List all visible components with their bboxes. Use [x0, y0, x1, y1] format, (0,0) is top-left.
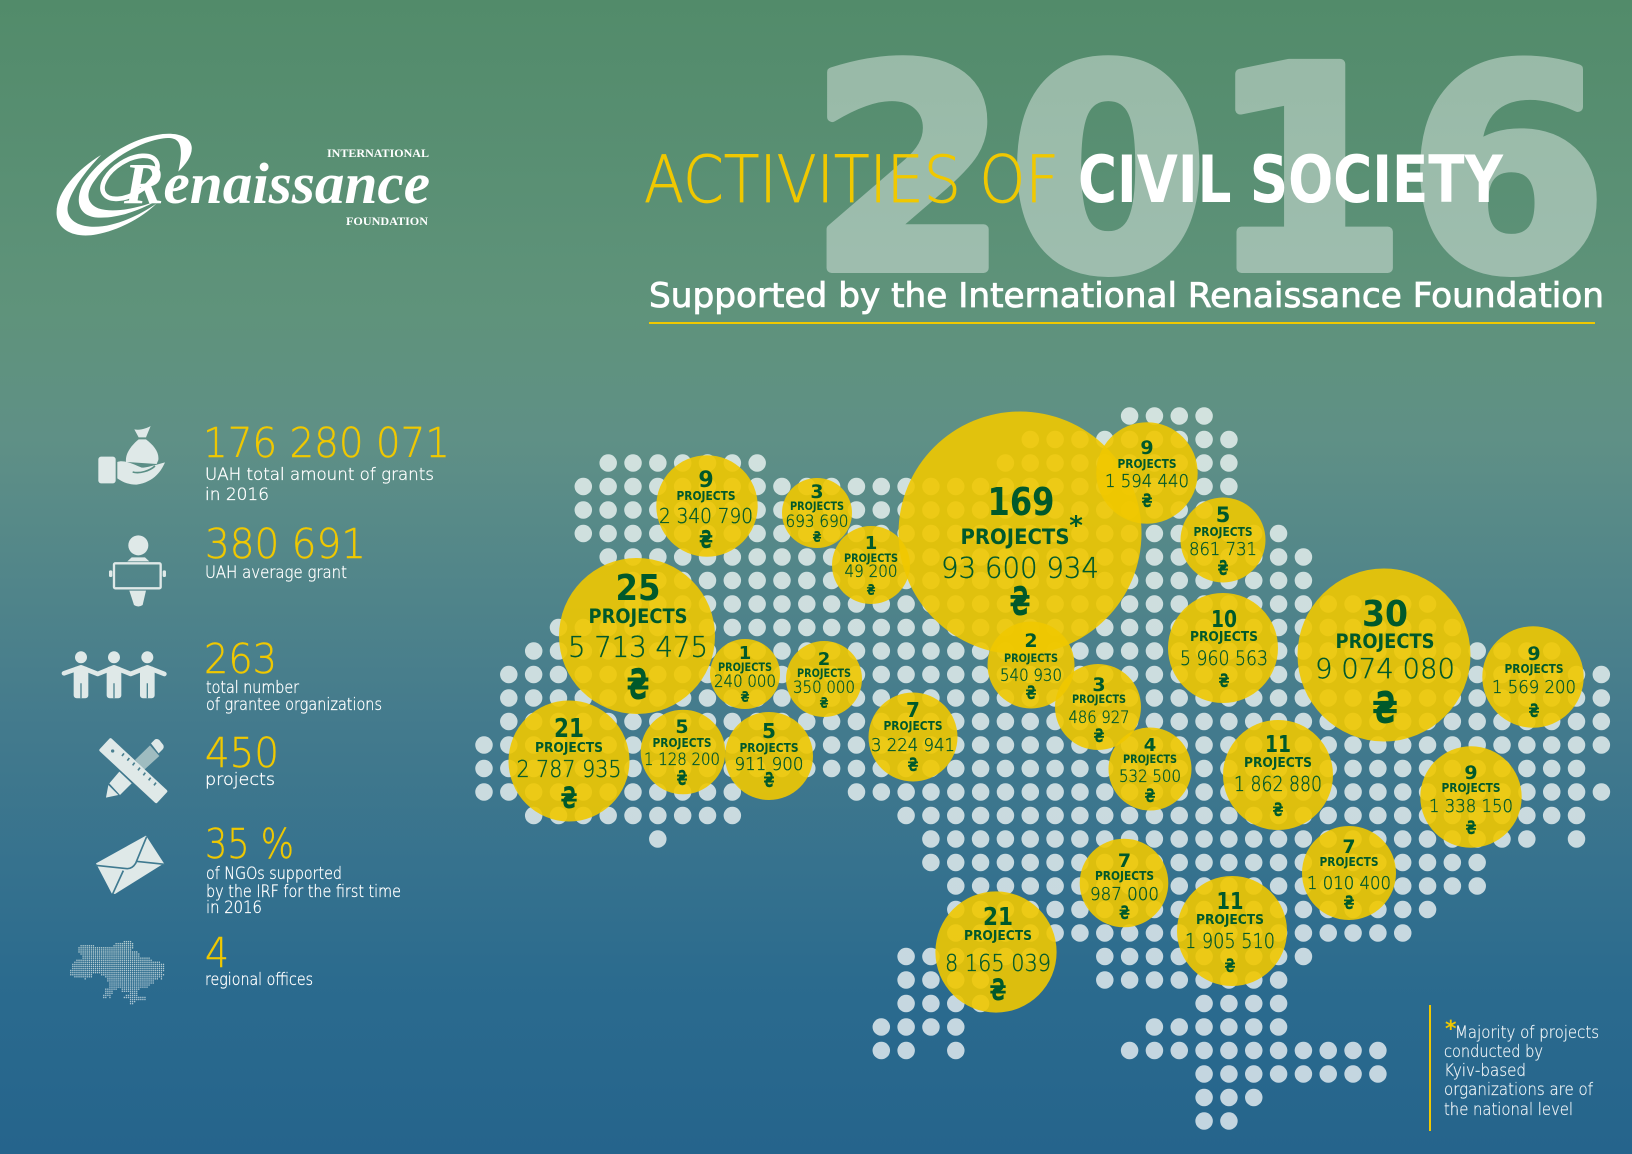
bubble: 9 projects 1 338 150 — [1420, 746, 1522, 848]
bubble: 7 projects 3 224 941: 3 224 941 — [871, 735, 955, 756]
stat: total amount of grants — [203, 419, 450, 505]
bubble: 3 projects 486 927: 3 — [1092, 674, 1106, 696]
icon: three people holding hands — [64, 651, 164, 698]
bubble: 2 projects 350 000: 2 — [818, 649, 830, 670]
bubble: 11 projects 1 905 510: 11 — [1216, 889, 1244, 915]
bubble: 5 projects 911 900: 911 900 — [734, 754, 804, 775]
bubble: 5 projects 911 900 — [725, 712, 813, 800]
bubble: 2 projects 350 000: PROJECTS — [797, 666, 851, 680]
bubble: 4 projects 532 500: ₴ — [1144, 785, 1156, 807]
bubble: 9 projects 1 594 440: 9 — [1140, 437, 1154, 459]
bubble: 7 projects 987 000: ₴ — [1119, 902, 1130, 924]
stat: total amount of grants: 176 280 071 — [203, 419, 450, 467]
bubble: 9 projects 2 340 790: 2 340 790 — [659, 504, 753, 528]
subtitle: Supported by the International Renaissance Foundation — [649, 276, 1604, 316]
icon: pencil and ruler — [99, 738, 168, 804]
stat: first-time NGOs: in 2016 — [206, 898, 262, 918]
bubble: 3 projects 693 690: 3 — [810, 481, 824, 503]
bubble: 5 projects 861 731: PROJECTS — [1194, 525, 1252, 539]
bubble: 5 projects 1 128 200: 1 128 200 — [644, 750, 720, 769]
bubble: 5 projects 911 900: PROJECTS — [740, 741, 798, 755]
icon: mini dotted map of Ukraine — [71, 942, 164, 1004]
bubble: 1 project 49 200: PROJECTS — [844, 551, 898, 565]
bubble: 169 projects 93 600 934 (Kyiv): PROJECTS — [960, 525, 1070, 550]
stat: average grant: UAH average grant — [205, 563, 347, 583]
bubble: 9 projects 1 594 440: PROJECTS — [1118, 457, 1176, 471]
footnote: Majority of projects — [1455, 1023, 1599, 1042]
bubble: 2 projects 540 930: 2 — [1024, 630, 1038, 652]
bubble: 1 project 49 200: 1 — [865, 533, 877, 554]
bubble: 30 projects 9 074 080 — [1298, 568, 1470, 742]
stat: grantee organizations — [204, 635, 382, 715]
bubble: 11 projects 1 862 880: 11 — [1265, 732, 1291, 758]
bubble: 1 project 49 200: ₴ — [866, 581, 876, 599]
bubble: 11 projects 1 862 880 — [1223, 720, 1333, 830]
footnote: organizations are of — [1444, 1080, 1593, 1099]
bubble: 7 projects 3 224 941: ₴ — [908, 754, 918, 776]
bubble: 9 projects 1 569 200: 9 — [1527, 643, 1541, 665]
bubble: 11 projects 1 905 510: PROJECTS — [1196, 912, 1264, 928]
bubble: 7 projects 3 224 941: 7 — [906, 698, 920, 722]
footnote: the national level — [1444, 1100, 1573, 1119]
bubble: 30 projects 9 074 080: 30 — [1362, 594, 1408, 635]
bubble: 9 projects 1 569 200 — [1482, 626, 1584, 728]
bubble: 9 projects 1 594 440: ₴ — [1142, 490, 1152, 512]
bubble: 169 projects 93 600 934 (Kyiv) — [898, 412, 1142, 654]
stat: grantee organizations: total number — [206, 678, 299, 698]
bubble: 2 projects 540 930: PROJECTS — [1004, 651, 1058, 665]
bubble: 7 projects 987 000: 987 000 — [1090, 884, 1159, 905]
stat: projects: 450 — [205, 729, 279, 777]
bubble: 10 projects 5 960 563: 5 960 563 — [1180, 647, 1268, 670]
bubble: 9 projects 1 338 150: ₴ — [1466, 817, 1476, 839]
big year 2016: 2016 — [809, 9, 1607, 335]
bubble: 5 projects 1 128 200: 5 — [675, 716, 689, 738]
bubble: 21 projects 2 787 935: 21 — [554, 714, 584, 744]
bubble: 10 projects 5 960 563: PROJECTS — [1190, 629, 1258, 645]
logo: International Renaissance Foundation: INTERNATIONAL — [327, 148, 429, 160]
bubble: 1 project 240 000 — [710, 639, 780, 709]
bubble: 5 projects 861 731 — [1180, 498, 1266, 582]
bubble: 11 projects 1 862 880: ₴ — [1272, 799, 1284, 821]
bubble: 169 projects 93 600 934 (Kyiv): 169 — [988, 480, 1054, 524]
bubble: 3 projects 693 690: PROJECTS — [790, 499, 844, 513]
bubble: 2 projects 540 930: ₴ — [1026, 682, 1036, 704]
bubble: 1 project 49 200 — [832, 526, 910, 604]
bubble: 25 projects 5 713 475: PROJECTS — [588, 605, 688, 628]
footnote: conducted by — [1444, 1042, 1543, 1061]
bubble: 2 projects 350 000: ₴ — [820, 694, 829, 712]
bubble: 9 projects 1 569 200: ₴ — [1528, 700, 1540, 722]
bubble: 2 projects 540 930 — [988, 622, 1074, 708]
bubble: 5 projects 861 731: ₴ — [1218, 556, 1228, 580]
bubble: 169 projects 93 600 934 (Kyiv): ₴ — [1010, 580, 1030, 625]
bubble: 7 projects 1 010 400: PROJECTS — [1320, 855, 1378, 869]
bubble: 11 projects 1 905 510: ₴ — [1224, 955, 1236, 977]
bubble: 21 projects 2 787 935: 2 787 935 — [516, 757, 622, 783]
bubble: 5 projects 911 900: ₴ — [764, 768, 774, 792]
stat: regional offices: regional offices — [205, 970, 313, 990]
bubble: 9 projects 1 338 150: 9 — [1464, 762, 1478, 784]
bubble: 3 projects 486 927: 486 927 — [1068, 708, 1130, 728]
stat: first-time NGOs: by the IRF for the first time — [206, 882, 401, 902]
bubble: 3 projects 693 690: 693 690 — [786, 512, 848, 531]
bubble: 11 projects 1 905 510 — [1177, 876, 1287, 986]
bubble: 11 projects 1 862 880: 1 862 880 — [1234, 772, 1322, 796]
bubble: 21 projects 2 787 935 — [508, 700, 630, 822]
bubble: 21 projects 8 165 039 — [935, 891, 1057, 1013]
bubble: 7 projects 1 010 400: 7 — [1342, 836, 1356, 858]
bubble: 21 projects 2 787 935: PROJECTS — [535, 740, 603, 756]
stat: projects: projects — [205, 770, 275, 790]
bubble: 9 projects 2 340 790: PROJECTS — [676, 489, 736, 503]
bubble: 25 projects 5 713 475: ₴ — [626, 660, 650, 709]
bubble: 21 projects 8 165 039: 21 — [983, 902, 1013, 931]
title — [644, 143, 1504, 218]
stat: first-time NGOs: 35 % — [205, 820, 294, 868]
bubble: 1 project 240 000: PROJECTS — [718, 660, 772, 674]
bubble: 5 projects 1 128 200: PROJECTS — [652, 736, 712, 750]
bubble: 7 projects 987 000 — [1080, 839, 1168, 927]
footnote: * — [1445, 1017, 1457, 1042]
stat: grantee organizations: of grantee organizations — [206, 695, 382, 715]
bubble: 9 projects 2 340 790: ₴ — [699, 525, 713, 554]
bubble: 7 projects 1 010 400: ₴ — [1344, 892, 1354, 914]
bubble: 9 projects 2 340 790: 9 — [698, 468, 714, 493]
stat: total amount of grants: in 2016 — [205, 485, 269, 505]
bubble: 21 projects 8 165 039: ₴ — [990, 973, 1006, 1007]
logo: International Renaissance Foundation — [57, 134, 430, 235]
bubble: 3 projects 486 927 — [1055, 664, 1141, 750]
bubble: 5 projects 1 128 200 — [641, 710, 725, 794]
bubble: 11 projects 1 905 510: 1 905 510 — [1185, 929, 1275, 953]
logo: International Renaissance Foundation: FOUNDATION — [346, 216, 429, 228]
bubble: 1 project 49 200: 49 200 — [844, 562, 898, 581]
title: ACTIVITIES OF — [644, 143, 1059, 218]
bubble: 21 projects 8 165 039: PROJECTS — [964, 928, 1032, 944]
bubble: 5 projects 861 731: 861 731 — [1189, 539, 1257, 560]
bubble: 1 project 240 000: 240 000 — [714, 672, 776, 692]
bubble: 4 projects 532 500: PROJECTS — [1123, 752, 1177, 766]
stat: total amount of grants: UAH total amount of grants — [205, 465, 434, 485]
bubble: 5 projects 1 128 200: ₴ — [676, 766, 688, 790]
bubble: 7 projects 3 224 941: PROJECTS — [884, 719, 942, 733]
bubble: 25 projects 5 713 475 — [559, 558, 715, 714]
bubble: 9 projects 1 338 150: 1 338 150 — [1429, 796, 1513, 817]
bubble: 169 projects 93 600 934 (Kyiv): 93 600 934 — [941, 552, 1099, 585]
bubble: 25 projects 5 713 475: 25 — [616, 568, 660, 609]
bubble: 169 projects 93 600 934 (Kyiv): * — [1069, 511, 1083, 541]
bubble: 25 projects 5 713 475: 5 713 475 — [568, 631, 708, 664]
bubble: 2 projects 350 000: 350 000 — [793, 678, 855, 698]
bubble: 5 projects 861 731: 5 — [1216, 503, 1230, 527]
title: CIVIL SOCIETY — [1078, 143, 1504, 218]
bubble: 9 projects 1 569 200: PROJECTS — [1504, 662, 1564, 676]
bubble: 30 projects 9 074 080: PROJECTS — [1336, 630, 1434, 653]
bubble: 3 projects 486 927: PROJECTS — [1072, 692, 1126, 706]
stat: first-time NGOs — [205, 820, 401, 918]
stat: first-time NGOs: of NGOs supported — [206, 864, 342, 884]
bubble: 7 projects 987 000: 7 — [1118, 850, 1131, 872]
bubble: 7 projects 3 224 941 — [868, 692, 958, 782]
icon: person holding board — [109, 535, 166, 606]
bubble: 3 projects 693 690: ₴ — [812, 528, 822, 546]
bubble: 3 projects 486 927: ₴ — [1094, 725, 1104, 747]
bubble: 4 projects 532 500: 532 500 — [1119, 767, 1181, 787]
bubble: 10 projects 5 960 563 — [1168, 593, 1278, 703]
bubble: 1 project 240 000: 1 — [739, 643, 751, 664]
stat: grantee organizations: 263 — [204, 635, 277, 683]
bubble: 2 projects 540 930: 540 930 — [1000, 666, 1062, 686]
bubble: 9 projects 1 594 440: 1 594 440 — [1105, 471, 1189, 492]
bubble: 9 projects 1 338 150: PROJECTS — [1442, 781, 1500, 795]
bubble: 10 projects 5 960 563: 10 — [1211, 607, 1237, 633]
stat: average grant: 380 691 — [205, 520, 366, 568]
stat: regional offices: 4 — [205, 929, 229, 977]
footnote — [1429, 1005, 1599, 1131]
icon: hand holding money bag — [98, 426, 165, 485]
dotted map of Ukraine — [484, 416, 1602, 1121]
stat: regional offices — [205, 929, 313, 990]
bubble: 7 projects 1 010 400 — [1302, 826, 1396, 920]
bubble: 2 projects 350 000 — [786, 641, 862, 717]
bubble: 21 projects 2 787 935: ₴ — [560, 781, 578, 815]
bubble: 4 projects 532 500: 4 — [1144, 735, 1156, 756]
icon: envelope — [95, 836, 165, 894]
bubble: 21 projects 8 165 039: 8 165 039 — [945, 951, 1051, 977]
footnote: Kyiv-based — [1444, 1061, 1526, 1080]
bubble: 30 projects 9 074 080: ₴ — [1372, 683, 1398, 734]
bubble: 9 projects 1 569 200: 1 569 200 — [1492, 677, 1576, 698]
bubble: 9 projects 2 340 790 — [656, 455, 758, 557]
bubble: 7 projects 1 010 400: 1 010 400 — [1307, 873, 1391, 894]
bubble: 5 projects 911 900: 5 — [762, 719, 776, 743]
bubble: 1 project 240 000: ₴ — [740, 688, 750, 706]
bubble: 11 projects 1 862 880: PROJECTS — [1244, 755, 1312, 771]
bubble: 30 projects 9 074 080: 9 074 080 — [1315, 652, 1455, 685]
bubble: 4 projects 532 500 — [1108, 728, 1192, 810]
bubble: 10 projects 5 960 563: ₴ — [1218, 670, 1230, 692]
logo: International Renaissance Foundation: Renaissance — [123, 151, 430, 216]
bubble: 3 projects 693 690 — [782, 478, 852, 548]
bubble: 7 projects 987 000: PROJECTS — [1095, 869, 1154, 883]
bubble: 9 projects 1 594 440 — [1096, 422, 1198, 524]
